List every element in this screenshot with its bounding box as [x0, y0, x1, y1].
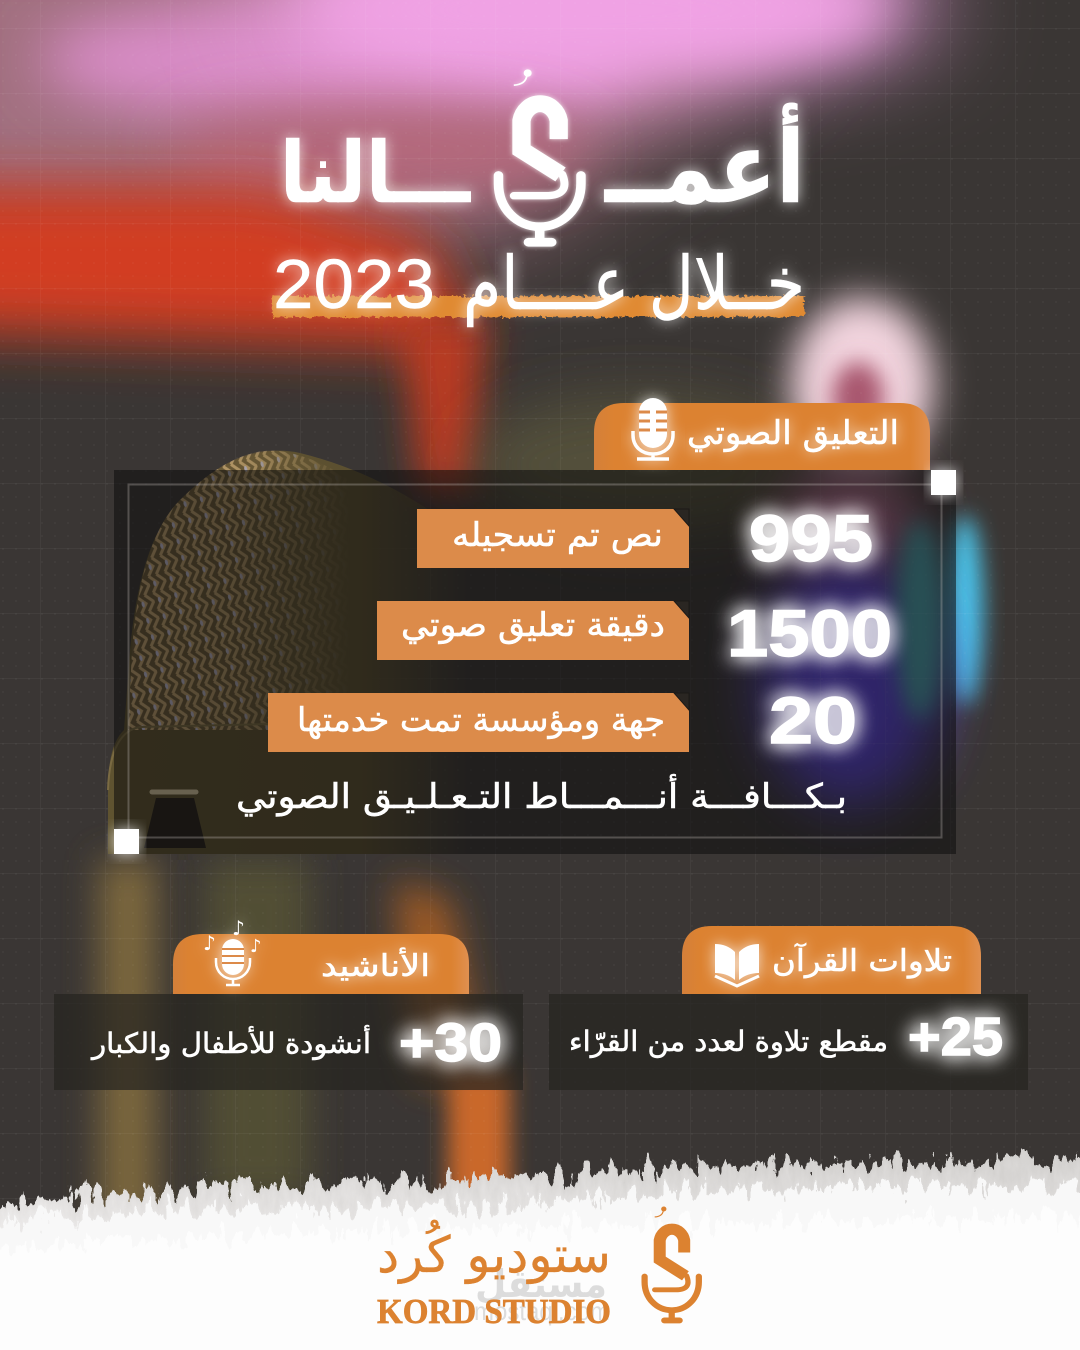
subtitle with brush underline: خــلال عــــام — [463, 241, 805, 327]
stat row: 1500: دقيقة تعليق صوتي — [401, 605, 665, 645]
icon: microphone with notes: ♪ — [250, 936, 262, 957]
microphone photo — [107, 450, 410, 854]
footer logo — [377, 1207, 699, 1331]
panel: nasheeds — [54, 916, 523, 1090]
brand name latin: KORD STUDIO — [377, 1292, 611, 1331]
description: مقطع تلاوة لعدد من القرّاء — [569, 1025, 888, 1058]
number: +25 — [908, 1007, 1003, 1067]
icon: microphone with notes — [203, 916, 262, 985]
corner marker bottom left — [114, 829, 139, 854]
stat row: 995: 995 — [749, 501, 873, 575]
logo mark — [498, 69, 581, 242]
stat row: 1500: 1500 — [727, 596, 892, 670]
title — [280, 69, 805, 242]
panel: voice-over — [114, 398, 956, 854]
caption: بـكـــافـــة أنـــمـــاط التـعـلـيـق الصوتي — [236, 774, 847, 817]
icon: open book — [715, 944, 759, 986]
stat row: 995: نص تم تسجيله — [452, 515, 663, 555]
subtitle with brush underline — [272, 241, 805, 327]
tab: voice-over heading — [594, 398, 930, 470]
stat row: 20: جهة ومؤسسة تمت خدمتها — [297, 700, 665, 739]
heading: الأناشيد — [321, 946, 430, 984]
heading: تلاوات القرآن — [772, 943, 952, 979]
watermark: mostaql.com — [474, 1296, 610, 1326]
corner marker top right — [931, 470, 956, 495]
number: +30 — [399, 1013, 502, 1073]
icon: microphone with notes: ♪ — [232, 916, 245, 940]
stat row: 20 — [268, 683, 857, 757]
brand name arabic: ستوديو كُرد — [377, 1219, 611, 1284]
stat row: 995 — [417, 501, 873, 575]
watermark — [474, 1262, 610, 1326]
title word right: أعمــ — [604, 102, 805, 226]
torn white paper footer — [0, 1160, 1080, 1350]
title word left: ـــالنا — [280, 124, 471, 222]
icon: microphone with notes: ♪ — [203, 931, 216, 955]
description: أنشودة للأطفال والكبار — [90, 1024, 371, 1060]
panel: Quran recitations — [549, 926, 1028, 1090]
stat row: 1500 — [377, 596, 892, 670]
watermark: مستقل — [475, 1262, 607, 1306]
subtitle with brush underline: 2023 — [273, 245, 435, 323]
icon: microphone — [633, 398, 673, 459]
stat row: 20: 20 — [769, 683, 857, 757]
heading text: التعليق الصوتي — [687, 413, 899, 453]
logo mark footer — [645, 1207, 699, 1320]
